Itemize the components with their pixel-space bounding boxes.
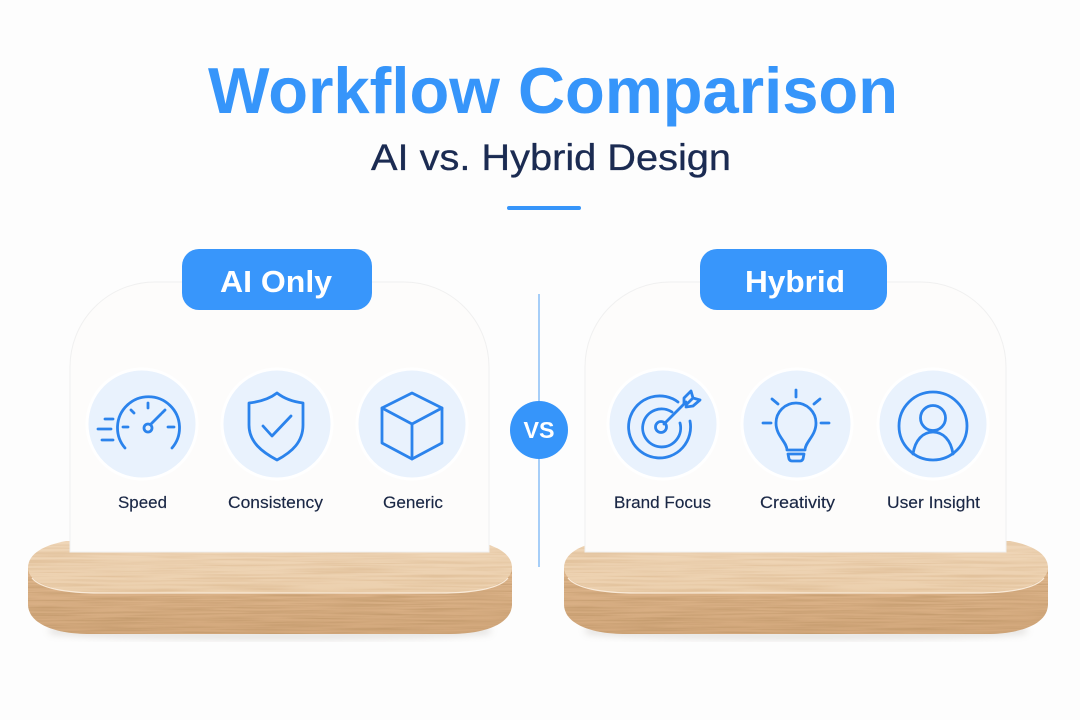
heading pill: AI Only (182, 249, 372, 310)
title underline (507, 206, 581, 210)
title: Workflow Comparison (208, 54, 898, 127)
icon: target with arrow (629, 391, 700, 458)
label: Speed (118, 494, 167, 512)
heading pill: AI Only: AI Only (220, 264, 333, 299)
card (70, 282, 489, 552)
subtitle: AI vs. Hybrid Design (371, 137, 731, 178)
icon: cube (382, 393, 442, 459)
item: User Insight (878, 369, 988, 512)
wooden base (564, 538, 1048, 636)
icon: shield check (249, 393, 303, 460)
item: Speed (87, 369, 197, 512)
label: Consistency (228, 494, 324, 512)
wooden base (28, 538, 512, 636)
item: Generic (357, 369, 467, 512)
center divider line (538, 294, 540, 567)
panel: Hybrid (564, 249, 1048, 636)
label: Creativity (760, 494, 836, 512)
label: User Insight (887, 494, 980, 512)
label: Generic (383, 494, 443, 512)
item: Brand Focus (608, 369, 718, 512)
panel: AI Only (28, 249, 512, 636)
icon: speedometer (98, 397, 179, 448)
vs badge: VS (524, 417, 554, 443)
heading pill: Hybrid: Hybrid (745, 264, 845, 299)
icon: light bulb (763, 390, 829, 461)
item: Creativity (742, 369, 852, 512)
label: Brand Focus (614, 494, 711, 512)
heading pill: Hybrid (700, 249, 887, 310)
vs badge (510, 401, 568, 459)
item: Consistency (222, 369, 332, 512)
icon: user in circle (899, 392, 967, 460)
card (585, 282, 1006, 552)
